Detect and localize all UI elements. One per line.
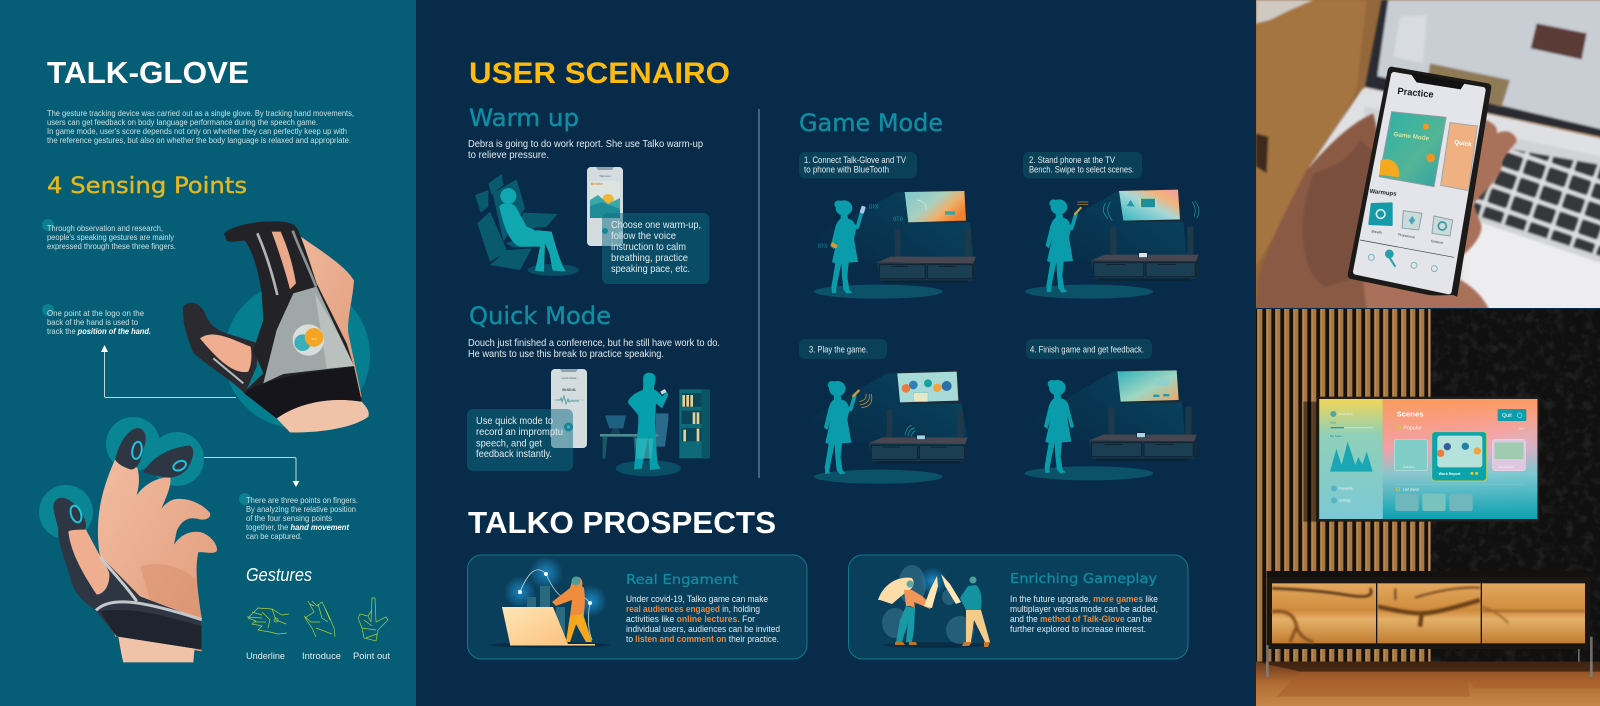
note: three fingers (42, 219, 176, 251)
callout: warm-up instructions: speaking pace, etc. (611, 264, 690, 275)
TV quit button: Quit (1502, 413, 1512, 419)
note: position of the hand: back of the hand is used to (47, 317, 138, 327)
note: three fingers: expressed through these three fingers. (47, 241, 176, 251)
callout: warm-up instructions: breathing, practice (611, 253, 688, 264)
illustration: man in office (600, 373, 710, 476)
callout: quick mode instructions: record an impromptu (476, 427, 563, 438)
card: real engagement (468, 555, 807, 659)
text block: quick mode scenario: Douch just finished a conference, but he still have work to do. (468, 338, 720, 349)
floor (1256, 662, 1600, 706)
heading: Game Mode: Game Mode (799, 109, 943, 137)
TV left sidebar: My Stats (1330, 434, 1342, 438)
step 1 label: to phone with BlueTooth (804, 164, 889, 174)
callout: quick mode instructions: Use quick mode to (476, 416, 553, 427)
photo: living room TV (1256, 305, 1600, 706)
text block: glove introduction: users can get feedback on body language performance during the speech game. (47, 117, 318, 127)
step 2 label: 2. Stand phone at the TV (1029, 155, 1116, 165)
hand behind phone (1256, 113, 1517, 310)
note: three fingers: people's speaking gestures are mainly (47, 232, 175, 242)
mockup: warm-up phone (587, 167, 623, 246)
icon: point out gesture (358, 598, 388, 641)
photo: phone app over laptop: Pronounce (1398, 233, 1415, 239)
TV: Presentation (1498, 465, 1514, 469)
photo: phone app over laptop: Warmups (1369, 189, 1397, 198)
TV (1317, 397, 1539, 522)
illustration: step 1 scene: ((ᛒ)) (818, 243, 828, 249)
illustration: woman seated in vehicle (475, 174, 579, 276)
card: enriching gameplay (848, 555, 1188, 659)
title: TALK-GLOVE: TALK-GLOVE (47, 55, 249, 90)
illustration: presenter and laptop (490, 556, 610, 648)
callout: quick mode instructions: speech, and get (476, 438, 542, 450)
photo: phone app over laptop: Breath (1371, 229, 1382, 235)
photo: phone app over laptop (1256, 0, 1600, 310)
TV: Last played (1403, 488, 1419, 492)
text block: enriching gameplay (1010, 594, 1158, 635)
callout: warm-up instructions (602, 213, 710, 284)
note: position of the hand: One point at the logo on the (47, 308, 144, 318)
icon: Talko logo (293, 324, 324, 356)
TV: Self-intro (1403, 465, 1415, 469)
illustration: step 2 scene (1013, 188, 1199, 299)
note: position of the hand (42, 304, 151, 336)
illustration: step 3 scene (790, 370, 968, 484)
title: USER SCENAIRO: USER SCENAIRO (469, 57, 730, 90)
text block: quick mode scenario (468, 338, 720, 360)
icon: Talko logo: ... (311, 334, 317, 341)
step 2 label (1023, 152, 1142, 178)
step 3 label: 3. Play the game. (809, 344, 868, 354)
labels: gesture names (246, 651, 390, 662)
mockup: warm-up phone: Warmups (599, 174, 611, 178)
heading: Quick Mode: Quick Mode (469, 302, 611, 330)
text block: warm up scenario: Debra is going to do work report. She use Talko warm-up (468, 139, 703, 150)
note: position of the hand: track the position of the hand. (47, 326, 151, 336)
text block: glove introduction (47, 108, 354, 145)
finger sensing halos (39, 417, 204, 539)
labels: gesture names: Underline (246, 651, 285, 662)
divider (758, 109, 760, 478)
step 4 label (1026, 339, 1152, 359)
illustration: step 4 scene (1012, 369, 1197, 480)
TV left sidebar: Favourite (1339, 487, 1353, 491)
thumb and bottom fingers (1429, 295, 1458, 300)
phone body (1352, 71, 1487, 296)
step 4 label: 4. Finish game and get feedback. (1030, 344, 1144, 354)
teal circle behind hand (224, 282, 370, 428)
panel: talk-glove (0, 0, 416, 706)
illustration: two players with light swords (878, 565, 990, 648)
illustration: step 1 scene (798, 189, 976, 299)
photo: phone app over laptop: Quick (1454, 139, 1473, 148)
mockup: quick mode phone: Quick Mode (562, 376, 577, 380)
text block: enriching gameplay: and the method of Talk-Glove can be (1010, 614, 1152, 625)
text block: real engagement: activities like online lectures. For (626, 614, 756, 625)
panel: user scenario and prospects (416, 0, 1256, 706)
phone text: Practice (1397, 86, 1434, 100)
callout: quick mode instructions: feedback instantly. (476, 449, 552, 460)
text block: real engagement (626, 594, 780, 645)
text block: enriching gameplay: In the future upgrade, more games like (1010, 594, 1158, 605)
callout: quick mode instructions (467, 409, 573, 471)
note: three points on fingers: By analyzing the relative position (246, 504, 356, 514)
TV heading: Scenes (1397, 410, 1423, 419)
labels: gesture names: Introduce (302, 651, 341, 662)
TV quit button (1498, 409, 1526, 421)
note: three points on fingers (239, 493, 358, 541)
note: three fingers: Through observation and research, (47, 223, 163, 233)
callout: warm-up instructions: instruction to calm (611, 242, 686, 253)
title: TALKO PROSPECTS: TALKO PROSPECTS (468, 505, 776, 540)
text block: quick mode scenario: He wants to use this break to practice speaking. (468, 349, 664, 360)
note: three points on fingers: can be captured. (246, 531, 302, 541)
text block: enriching gameplay: further explored to increase interest. (1010, 624, 1146, 635)
cabinet (1266, 571, 1593, 662)
heading: Enriching Gameplay: Enriching Gameplay (1010, 571, 1157, 587)
text block: warm up scenario (468, 139, 703, 161)
callout: warm-up instructions: Choose one warm-up, (611, 220, 701, 231)
text block: glove introduction: In game mode, user's score depends not only on whether they can perfectly keep up with (47, 126, 347, 136)
TV left sidebar: Flora Zhou (1339, 412, 1353, 416)
wood slats (1256, 308, 1431, 662)
mockup: quick mode phone (551, 369, 587, 448)
heading: 4 Sensing Points: 4 Sensing Points (47, 174, 247, 199)
labels: gesture names: Point out (353, 651, 390, 662)
icon: underline gesture (247, 608, 289, 634)
icon: introduce gesture (304, 601, 335, 637)
illustration: step 1 scene: ((ᛒ)) (869, 204, 879, 210)
arrow: fingers to note (204, 458, 300, 487)
TV left sidebar: Sc/d (1330, 421, 1336, 425)
TV left sidebar: Settings (1339, 499, 1351, 503)
callout: warm-up instructions: follow the voice (611, 231, 676, 242)
heading: Warm up: Warm up (469, 104, 579, 132)
note: three points on fingers: There are three points on fingers. (246, 495, 358, 505)
step 2 label: Bench. Swipe to select scenes. (1029, 164, 1134, 174)
step 1 label: 1. Connect Talk-Glove and TV (804, 155, 907, 165)
text block: enriching gameplay: multiplayer versus mode can be added, (1010, 604, 1158, 615)
photo: phone app over laptop: Gesture (1431, 239, 1443, 245)
mockup: quick mode phone: 00:02:41 (562, 388, 576, 392)
illustration: glove on fingers (53, 428, 217, 662)
text block: glove introduction: the reference gestures, but also on whether the body language is relaxed and appropriate. (47, 135, 351, 145)
TV left sidebar (1330, 411, 1373, 503)
text block: real engagement: to listen and comment on their practice. (626, 634, 779, 645)
note: three points on fingers: together, the hand movement (246, 522, 350, 532)
text block: real engagement: real audiences engaged in, holding (626, 604, 760, 615)
mockup: warm-up phone: Breathe (591, 182, 603, 186)
step 1 label (799, 152, 917, 178)
photo: phone app over laptop: Game Mode (1393, 131, 1430, 142)
text block: real engagement: individual users, audiences can be invited (626, 624, 780, 635)
heading: Gestures: Gestures (246, 565, 312, 585)
note: three points on fingers: of the four sensing points (246, 513, 332, 523)
TV: Work Report (1439, 472, 1461, 476)
illustration: step 1 scene: ((ᛒ)) (893, 216, 903, 222)
TV: Sort (1519, 426, 1524, 430)
text block: warm up scenario: to relieve pressure. (468, 150, 549, 161)
illustration: glove on back of hand (183, 221, 369, 432)
text block: real engagement: Under covid-19, Talko game can make (626, 594, 768, 605)
step 3 label (799, 339, 887, 359)
TV: Popular (1403, 426, 1422, 432)
heading: Real Engament: Real Engament (626, 572, 738, 588)
text block: glove introduction: The gesture tracking device was carried out as a single glove. By tracking hand movements, (47, 108, 354, 118)
arrow: logo to note (101, 345, 236, 398)
